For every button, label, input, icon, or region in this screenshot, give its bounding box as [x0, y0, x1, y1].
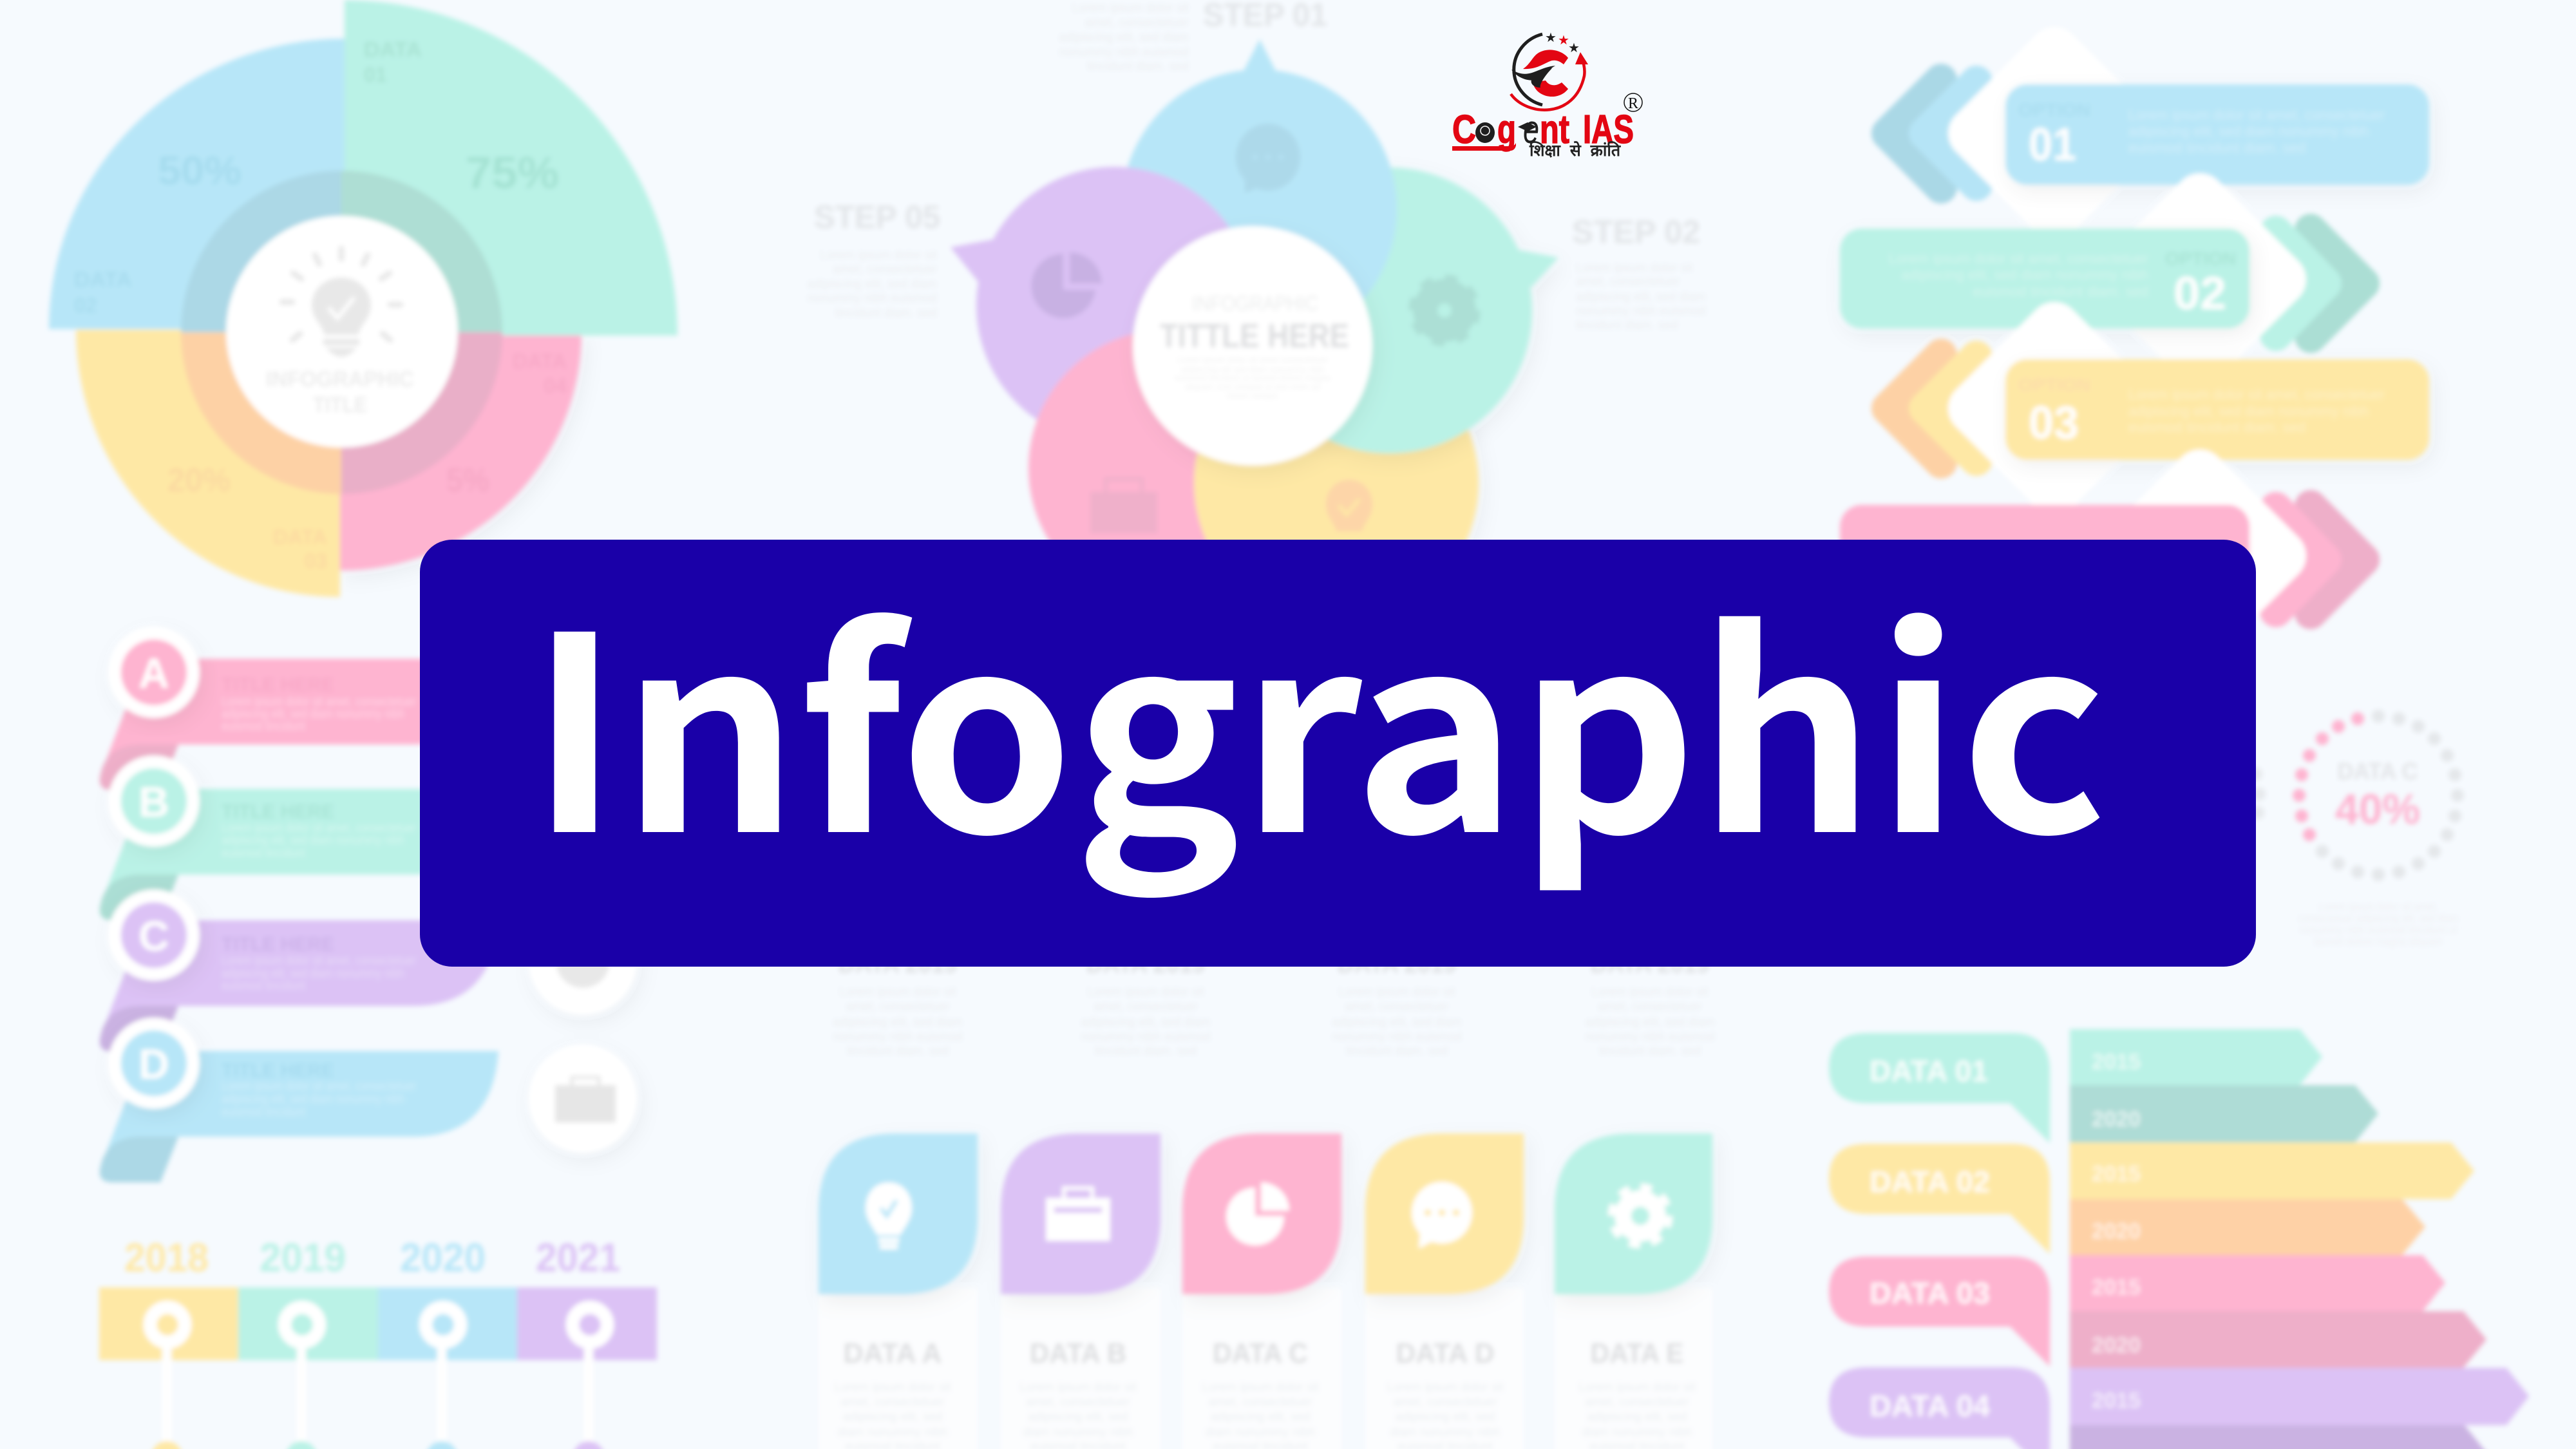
gauge text: laoreet dolore magna aliquam — [2314, 935, 2443, 948]
step 01 text — [1059, 1, 1189, 73]
step 02 mint petal — [1246, 167, 1558, 453]
centre disc — [1133, 226, 1372, 466]
step 05 text: tincidunt diam. sed — [835, 307, 937, 320]
data labels — [74, 38, 567, 573]
centre title: INFOGRAPHIC — [1192, 292, 1318, 315]
title: Infographic — [529, 518, 2107, 910]
step 02 text: nonummy nibh euismod — [1576, 305, 1706, 318]
step 01 text: nonummy nibh euismod — [1059, 46, 1189, 59]
centre title: TITLE — [313, 393, 367, 417]
card C: DATA C — [1213, 1338, 1308, 1369]
ribbon D: euismod tincidunt — [222, 1105, 305, 1119]
centre disc — [226, 216, 458, 448]
ribbon A: euismod tincidunt — [222, 719, 305, 734]
icon: bulb — [1326, 480, 1372, 531]
gauge label: DATA C — [2338, 758, 2418, 784]
card A: DATA A — [844, 1338, 942, 1369]
step 01 blue petal — [1121, 39, 1397, 348]
card E: adipiscing elit, sed — [1587, 1410, 1687, 1424]
percent labels: 50% — [158, 149, 242, 193]
ribbon D: Lorem ipsum dolor sit amet, consectetuer — [222, 1079, 416, 1094]
card B: adipiscing elit, sed — [1028, 1410, 1128, 1424]
card C: Lorem ipsum dolor sit — [1202, 1381, 1320, 1394]
icon: briefcase disc — [529, 1045, 637, 1153]
logo wordmark — [1452, 108, 1634, 152]
timeline markers — [150, 1307, 607, 1449]
column body text: adipiscing elit, sed diam — [1332, 1016, 1462, 1029]
card A: diam nonummy nibh — [837, 1426, 948, 1439]
column headings: DATA 2019 — [838, 950, 957, 978]
ribbon D — [100, 1024, 498, 1182]
icon: chat — [1236, 124, 1300, 193]
logo wordmark: nt — [1540, 108, 1569, 152]
centre title — [1160, 292, 1349, 401]
card E: Lorem ipsum dolor sit — [1578, 1381, 1696, 1394]
ribbon C: euismod tincidunt — [222, 979, 305, 993]
yellow segment — [76, 330, 340, 597]
speech labels: DATA 02 — [1870, 1165, 1990, 1198]
logo registered mark — [1624, 93, 1642, 112]
icon: pie — [1031, 252, 1102, 318]
centre title: adipiscing elit sed diam nonummy nibh — [1180, 365, 1325, 374]
step 01 text: tincidunt diam. sed — [1087, 60, 1189, 73]
logo stars — [1545, 31, 1580, 55]
logo C mark — [1523, 50, 1568, 97]
option 01: Lorem ipsum dolor sit amet, consectetuer — [2128, 107, 2385, 123]
logo stars: ★ — [1545, 31, 1557, 45]
bar year labels: 2015 — [2092, 1162, 2141, 1186]
gauge text — [2298, 900, 2459, 948]
centre title: Lorem ipsum dolor sit amet consectetuer — [1177, 355, 1329, 365]
card C: amet, consectetuer — [1208, 1396, 1312, 1409]
year labels: 2021 — [536, 1236, 620, 1280]
logo wordmark: e — [1523, 108, 1539, 152]
step 02 text: adipiscing elit, sed diam — [1576, 290, 1706, 304]
column headings: DATA 2019 — [1086, 950, 1206, 978]
column headings: DATA 2019 — [1337, 950, 1457, 978]
percent labels — [158, 147, 559, 499]
column body text: tincidunt diam. sed — [1599, 1045, 1701, 1058]
logo stars: ★ — [1568, 41, 1580, 55]
column body text: amet, consectetuer — [1345, 1000, 1449, 1014]
column body text: nonummy nibh euismod — [833, 1030, 963, 1044]
bar year labels: 2020 — [2092, 1107, 2141, 1132]
column body text: amet, consectetuer — [1598, 1000, 1702, 1014]
ribbon B: euismod tincidunt — [222, 846, 305, 860]
option 03 — [1888, 328, 2429, 489]
gauge text: Lorem ipsum dolor sit amet, — [2318, 900, 2438, 913]
logo tagline: शिक्षा से क्रांति — [1529, 141, 1622, 160]
data labels: DATA — [273, 526, 327, 549]
step 05 purple petal — [951, 167, 1253, 444]
column body text: Lorem ipsum dolor sit — [1338, 985, 1456, 999]
timeline bar — [99, 1287, 657, 1360]
column body text: adipiscing elit, sed diam — [1585, 1016, 1715, 1029]
logo wordmark: C — [1452, 108, 1476, 152]
panel: data C dotted gauge — [2249, 710, 2464, 948]
ribbon C: adipiscing elit, sed diam nonummy nibh — [222, 967, 404, 981]
data labels: DATA — [74, 268, 132, 291]
option 01: 01 — [2029, 119, 2076, 171]
column body text: nonummy nibh euismod — [1081, 1030, 1211, 1044]
ribbon B — [100, 762, 498, 920]
card C: diam nonummy nibh — [1205, 1426, 1316, 1439]
step 02 text — [1576, 261, 1706, 332]
icon discs — [529, 907, 637, 1015]
gauge value: 40% — [2335, 785, 2420, 833]
step 03 pink petal — [1028, 330, 1305, 607]
column body text: tincidunt diam. sed — [1095, 1045, 1197, 1058]
percent labels: 20% — [167, 462, 231, 499]
ribbon B: B — [138, 778, 169, 826]
pink dots — [2293, 712, 2364, 841]
step 01 text: Lorem ipsum dolor sit — [1072, 1, 1189, 15]
icon: briefcase — [1090, 479, 1157, 533]
step 05 text: amet, consectetuer — [833, 263, 938, 276]
gauge text: consectetuer adipiscing elit, sed diam — [2298, 912, 2459, 925]
title banner — [420, 518, 2256, 967]
yellow overlap — [1191, 452, 1307, 540]
step 05 text — [807, 249, 938, 320]
card A: amet, consectetuer — [840, 1396, 945, 1409]
ribbon C: Lorem ipsum dolor sit amet, consectetuer — [222, 954, 416, 968]
data labels: DATA — [513, 350, 567, 373]
option 02: 02 — [2174, 268, 2226, 319]
panel: data labels with arrow bars — [1829, 1029, 2529, 1449]
card D: Lorem ipsum dolor sit — [1387, 1381, 1504, 1394]
step 02 text: Lorem ipsum dolor sit — [1576, 261, 1693, 275]
card C: adipiscing elit, sed — [1210, 1410, 1311, 1424]
logo: Cogent IAS — [1452, 31, 1642, 160]
neighbouring gauge dots — [2249, 768, 2266, 819]
step 05 text: Lorem ipsum dolor sit — [820, 249, 938, 262]
bar year labels: 2020 — [2092, 1219, 2141, 1244]
ribbon A: Lorem ipsum dolor sit amet, consectetuer — [222, 695, 416, 709]
option 02: Lorem ipsum dolor sit amet, consectetuer — [1888, 251, 2148, 267]
centre title: euismod tincidunt ut laoreet dolore magna — [1175, 373, 1331, 383]
ribbon C: C — [138, 912, 169, 960]
speech labels: DATA 04 — [1870, 1389, 1990, 1423]
step headings: STEP 05 — [814, 199, 940, 235]
panel: segmented pie chart — [49, 0, 677, 597]
percent labels: 5% — [446, 462, 489, 499]
card D: amet, consectetuer — [1393, 1396, 1497, 1409]
column body text: tincidunt diam. sed — [1346, 1045, 1448, 1058]
centre title — [266, 367, 414, 417]
option 03: euismod tincidunt diam. sed — [2128, 419, 2306, 435]
card A: Lorem ipsum dolor sit — [834, 1381, 952, 1394]
arrow bars — [2070, 1029, 2529, 1449]
speech labels — [1829, 1033, 2050, 1449]
speech labels: DATA 01 — [1870, 1054, 1988, 1088]
column headings: DATA 2019 — [1591, 950, 1709, 978]
card A — [819, 1133, 978, 1449]
card E: diam nonummy nibh — [1582, 1426, 1692, 1439]
ribbon D: D — [138, 1040, 169, 1088]
column body text: Lorem ipsum dolor sit — [1591, 985, 1709, 999]
data labels: 04 — [544, 374, 567, 397]
panel: option rows — [1840, 53, 2429, 636]
logo registered mark: R — [1628, 95, 1638, 112]
ribbon B: TITLE HERE — [222, 801, 334, 822]
option 03: 03 — [2029, 397, 2079, 449]
column body text: amet, consectetuer — [1094, 1000, 1198, 1014]
bar year labels: 2015 — [2092, 1388, 2141, 1413]
bar year labels — [2092, 1050, 2141, 1413]
data labels: 03 — [304, 549, 327, 573]
step 02 text: amet, consectetuer — [1576, 275, 1680, 289]
panel: five step petals — [815, 3, 1699, 540]
ribbon D: TITLE HERE — [222, 1060, 334, 1081]
year labels: 2019 — [260, 1236, 346, 1280]
column body text: Lorem ipsum dolor sit — [1087, 985, 1205, 999]
data labels: 01 — [364, 63, 387, 86]
step headings — [814, 0, 1700, 250]
year labels: 2020 — [400, 1236, 486, 1280]
ribbon A: adipiscing elit, sed diam nonummy nibh — [222, 707, 404, 721]
card E — [1555, 1133, 1712, 1449]
step 01 text: adipiscing elit, sed diam — [1059, 31, 1189, 44]
icon: gear — [1413, 279, 1476, 342]
option 01: adipiscing elit, sed diam nonummy nibh — [2128, 123, 2369, 139]
column body text: adipiscing elit, sed diam — [1081, 1016, 1211, 1029]
card D: diam nonummy nibh — [1390, 1426, 1501, 1439]
ribbon B: Lorem ipsum dolor sit amet, consectetuer — [222, 821, 416, 835]
step 01 text: amet, consectetuer — [1084, 16, 1189, 30]
blue segment — [49, 39, 345, 329]
option 03: Lorem ipsum dolor sit amet, consectetuer — [2128, 386, 2385, 402]
option 02 — [1840, 199, 2363, 360]
year labels — [124, 1236, 620, 1280]
panel: year timeline — [99, 1236, 657, 1449]
centre title: TITTLE HERE — [1160, 317, 1349, 355]
option 02: euismod tincidunt diam. sed — [1973, 283, 2148, 299]
option 01: OPTION — [2018, 100, 2090, 120]
option 01 — [1888, 53, 2429, 214]
data labels: DATA — [364, 38, 422, 61]
logo wordmark: g — [1497, 108, 1516, 152]
option 03: OPTION — [2018, 375, 2090, 395]
step 05 text: adipiscing elit, sed diam — [807, 278, 937, 291]
bar year labels: 2020 — [2092, 1333, 2141, 1358]
pink segment — [340, 332, 582, 571]
ribbon B: adipiscing elit, sed diam nonummy nibh — [222, 833, 404, 848]
column body text — [833, 985, 1715, 1058]
card E: DATA E — [1591, 1338, 1683, 1369]
logo ring — [1514, 34, 1542, 105]
step 05 text: nonummy nibh euismod — [807, 292, 937, 305]
card D: DATA D — [1396, 1338, 1494, 1369]
card D: adipiscing elit, sed — [1395, 1410, 1495, 1424]
panel: data cards A to E — [819, 1133, 1712, 1449]
logo stars: ★ — [1558, 33, 1569, 48]
step 04 yellow petal — [1194, 341, 1479, 625]
card D — [1365, 1133, 1524, 1449]
card B: amet, consectetuer — [1026, 1396, 1130, 1409]
centre title: minim veniam — [1227, 391, 1278, 401]
column body text: nonummy nibh euismod — [1585, 1030, 1715, 1044]
column body text: tincidunt diam. sed — [847, 1045, 949, 1058]
column body text: amet, consectetuer — [846, 1000, 950, 1014]
mint segment — [345, 0, 677, 336]
column body text: Lorem ipsum dolor sit — [839, 985, 957, 999]
panel: data 2019 text columns — [833, 950, 1715, 1058]
ribbon A: TITLE HERE — [222, 674, 334, 696]
grey dots — [2316, 710, 2464, 881]
column body text: adipiscing elit, sed diam — [833, 1016, 963, 1029]
ribbon C — [100, 896, 498, 1052]
option 03: adipiscing elit, sed diam nonummy nibh — [2128, 403, 2369, 419]
option 02: adipiscing elit, sed diam nonummy nibh — [1901, 267, 2148, 283]
ribbon D: adipiscing elit, sed diam nonummy nibh — [222, 1092, 404, 1106]
bar year labels: 2015 — [2092, 1050, 2141, 1074]
column headings — [838, 950, 1709, 978]
logo wordmark: IAS — [1583, 108, 1634, 152]
ribbon C: TITLE HERE — [222, 934, 334, 955]
percent labels: 75% — [466, 147, 559, 198]
card E: amet, consectetuer — [1585, 1396, 1689, 1409]
gauge text: nonummy nibh euismod tincidunt ut — [2299, 923, 2458, 936]
option 04 — [1840, 475, 2363, 636]
centre title: INFOGRAPHIC — [266, 367, 414, 392]
card B — [1001, 1133, 1160, 1449]
card B: Lorem ipsum dolor sit — [1019, 1381, 1137, 1394]
ribbon A — [100, 633, 498, 790]
panel: lettered ribbons — [100, 633, 637, 1182]
ribbon A: A — [138, 649, 169, 697]
step headings: STEP 02 — [1572, 214, 1700, 250]
option 01: euismod tincidunt diam. sed — [2128, 140, 2306, 156]
card C — [1182, 1133, 1341, 1449]
year labels: 2018 — [124, 1236, 209, 1280]
card B: DATA B — [1030, 1338, 1126, 1369]
icon: bulb — [282, 249, 401, 357]
data labels: 02 — [74, 294, 97, 317]
column body text: nonummy nibh euismod — [1332, 1030, 1462, 1044]
speech labels: DATA 03 — [1870, 1276, 1990, 1310]
step 02 text: tincidunt diam. sed — [1576, 319, 1678, 332]
inner ring — [181, 171, 502, 494]
option 02: OPTION — [2165, 249, 2236, 269]
card B: diam nonummy nibh — [1023, 1426, 1133, 1439]
bar year labels: 2015 — [2092, 1275, 2141, 1300]
centre title: aliquam erat volutpat ut wisi enim ad — [1185, 382, 1320, 392]
card A: adipiscing elit, sed — [842, 1410, 943, 1424]
